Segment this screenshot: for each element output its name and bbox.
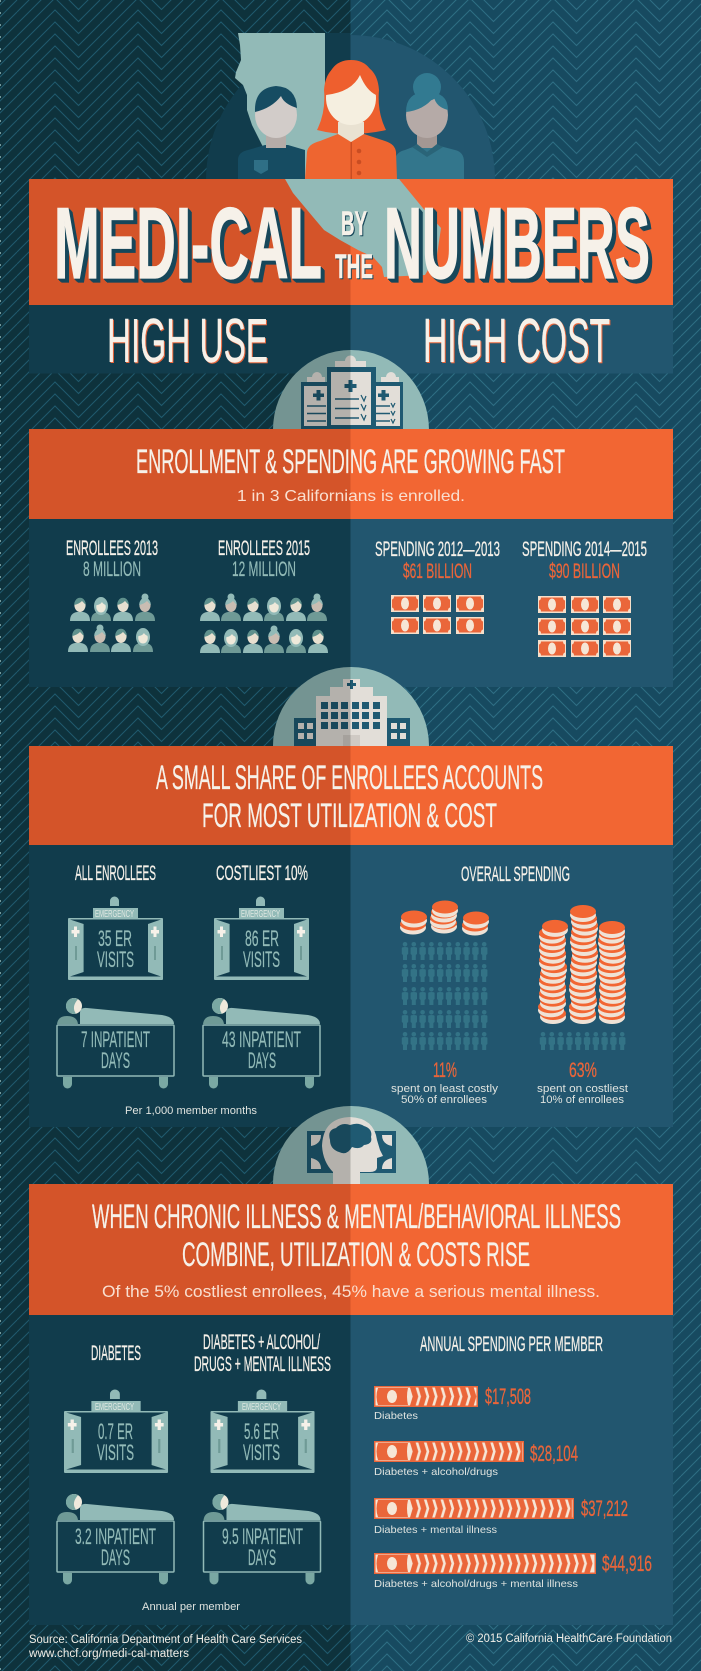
icon: ER door 35 visits: VISITS (97, 947, 134, 972)
person: man (238, 86, 305, 179)
stat: 11 percent: spent on least costly (391, 1083, 499, 1095)
icon: ER door 5.6 visits: EMERGENCY (242, 1402, 281, 1413)
enrollees 2015 label (218, 537, 310, 581)
figures: 10 percent of enrollees (540, 1032, 625, 1050)
title bar (29, 179, 673, 305)
icon: hospital in dome (273, 667, 429, 746)
icon: bed 7 inpatient days (57, 998, 174, 1088)
icon: clipboards in dome (273, 350, 429, 430)
section 3 header band (29, 1184, 673, 1315)
icon: bed 43 inpatient days: 43 INPATIENT (222, 1027, 301, 1052)
stat: 63 percent: 10% of enrollees (540, 1094, 625, 1106)
money icons: $90 billion (538, 596, 631, 657)
title: by: BY (341, 205, 367, 243)
title: Medi-Cal: MEDI-CAL (54, 188, 322, 300)
bar: diabetes + alcohol/drugs + mental illness: $44,916 (602, 1551, 652, 1576)
icon: bed 7 inpatient days: 7 INPATIENT (81, 1027, 150, 1052)
icon: bed 43 inpatient days: DAYS (248, 1048, 276, 1073)
section 1 header band (29, 429, 673, 519)
footer: copyright: © 2015 California HealthCare Foundation (466, 1633, 672, 1645)
icon: bed 7 inpatient days: DAYS (101, 1048, 130, 1073)
icon: ER door 86 visits: VISITS (243, 947, 280, 972)
icon: ER door 86 visits (214, 896, 309, 980)
bar: diabetes + alcohol/drugs: Diabetes + alcohol/drugs (374, 1466, 498, 1478)
coins: costliest (538, 905, 626, 1024)
chevron background: left (0, 0, 350, 1671)
icon: ER door 86 visits: EMERGENCY (241, 909, 280, 920)
bar: diabetes + mental illness (374, 1496, 628, 1536)
icon: bed 9.5 inpatient days: 9.5 INPATIENT (222, 1524, 303, 1549)
section 2 heading (156, 759, 543, 835)
stat: 63 percent: spent on costliest (537, 1083, 628, 1095)
icon: bed 3.2 inpatient days: 3.2 INPATIENT (75, 1524, 156, 1549)
spending 2012-2013 label (375, 538, 500, 583)
footer: source (28, 1634, 302, 1660)
text: DIABETES (91, 1342, 141, 1365)
stat: 63 percent: 63% (569, 1059, 597, 1082)
hero: dome, California and three people (29, 33, 673, 305)
people icons: 12 million (200, 594, 328, 653)
enrollees 2015 label: ENROLLEES 2015 (218, 537, 310, 560)
California shape (235, 33, 441, 277)
section 2 header band (29, 746, 673, 845)
spending 2014-2015 label: $90 BILLION (549, 560, 620, 583)
icon: bed 9.5 inpatient days (204, 1494, 320, 1584)
enrollees 2015 label: 12 MILLION (232, 558, 296, 581)
chevron background: right (350, 0, 701, 1671)
icon: ER door 5.6 visits: VISITS (243, 1440, 280, 1465)
icon: ER door 5.6 visits: 5.6 ER (244, 1419, 279, 1444)
section 3 subheading: Of the 5% costliest enrollees, 45% have a serious mental illness. (102, 1282, 600, 1301)
icon: bed 9.5 inpatient days: DAYS (248, 1545, 276, 1570)
stat: 11 percent: 50% of enrollees (401, 1094, 488, 1106)
panel: section 1 (29, 519, 673, 687)
label: diabetes plus alcohol, drugs and mental illness (194, 1331, 331, 1376)
bar: diabetes + alcohol/drugs (374, 1441, 578, 1478)
coins: least costly (400, 900, 489, 936)
icon: brain and money in dome (273, 1106, 429, 1184)
spending 2012-2013 label: SPENDING 2012—2013 (375, 538, 500, 561)
icon: ER door 0.7 visits: EMERGENCY (95, 1402, 134, 1413)
money icons: $61 billion (391, 595, 484, 634)
bar: diabetes (374, 1384, 531, 1422)
figures: 50 percent of enrollees (402, 942, 487, 1050)
enrollees 2013 label: ENROLLEES 2013 (66, 537, 158, 560)
enrollees 2013 label: 8 MILLION (83, 558, 141, 581)
heading: high use: HIGH USE (107, 307, 268, 376)
icon: ER door 35 visits: 35 ER (98, 926, 132, 951)
bar: diabetes: Diabetes (374, 1410, 418, 1422)
person: orange woman (305, 60, 397, 179)
icon: bed 43 inpatient days (203, 998, 320, 1088)
icon: ER door 35 visits (68, 896, 163, 980)
text: ALL ENROLLEES (75, 862, 156, 885)
stat: 11 percent (391, 1059, 499, 1106)
bar: diabetes + alcohol/drugs + mental illness: Diabetes + alcohol/drugs + mental illness (374, 1578, 578, 1590)
section 3 heading (92, 1198, 621, 1274)
panel: section 2 (29, 845, 673, 1127)
spending 2014-2015 label (522, 538, 647, 583)
bar: diabetes: $17,508 (485, 1384, 531, 1409)
icon: bed 3.2 inpatient days (57, 1494, 174, 1584)
footer: source: www.chcf.org/medi-cal-matters (28, 1648, 189, 1660)
label: costliest 10%: COSTLIEST 10% (216, 862, 308, 885)
icon: ER door 0.7 visits: 0.7 ER (98, 1419, 133, 1444)
footer: source: Source: California Department of Health Care Services (29, 1634, 302, 1646)
icon: bed 3.2 inpatient days: DAYS (101, 1545, 130, 1570)
icon: ER door 35 visits: EMERGENCY (95, 909, 134, 920)
text: DRUGS + MENTAL ILLNESS (194, 1353, 331, 1376)
panel: section 3 (29, 1315, 673, 1625)
section 1 subheading: 1 in 3 Californians is enrolled. (237, 488, 465, 505)
title: the: THE (335, 248, 373, 286)
bar: diabetes + alcohol/drugs + mental illness (374, 1551, 652, 1590)
label: overall spending: OVERALL SPENDING (461, 863, 570, 886)
note: annual per member: Annual per member (142, 1601, 240, 1613)
bar: diabetes + alcohol/drugs: $28,104 (530, 1441, 578, 1466)
bar: diabetes + mental illness: Diabetes + mental illness (374, 1524, 497, 1536)
note: per 1000 member months: Per 1,000 member months (125, 1105, 257, 1117)
stat: 63 percent (537, 1059, 628, 1106)
people icons: 8 million (68, 594, 155, 652)
icon: ER door 5.6 visits (210, 1390, 315, 1473)
bar: diabetes + mental illness: $37,212 (581, 1496, 628, 1521)
enrollees 2013 label (66, 537, 158, 581)
icon: ER door 0.7 visits (64, 1390, 168, 1473)
subtitle band (29, 305, 673, 374)
stat: 11 percent: 11% (433, 1059, 457, 1082)
icon: ER door 0.7 visits: VISITS (97, 1440, 134, 1465)
label: diabetes plus alcohol, drugs and mental illness: DIABETES + ALCOHOL/ (203, 1331, 320, 1354)
icon: ER door 86 visits: 86 ER (245, 926, 279, 951)
person: woman with bun (395, 73, 464, 179)
spending 2012-2013 label: $61 BILLION (403, 560, 472, 583)
